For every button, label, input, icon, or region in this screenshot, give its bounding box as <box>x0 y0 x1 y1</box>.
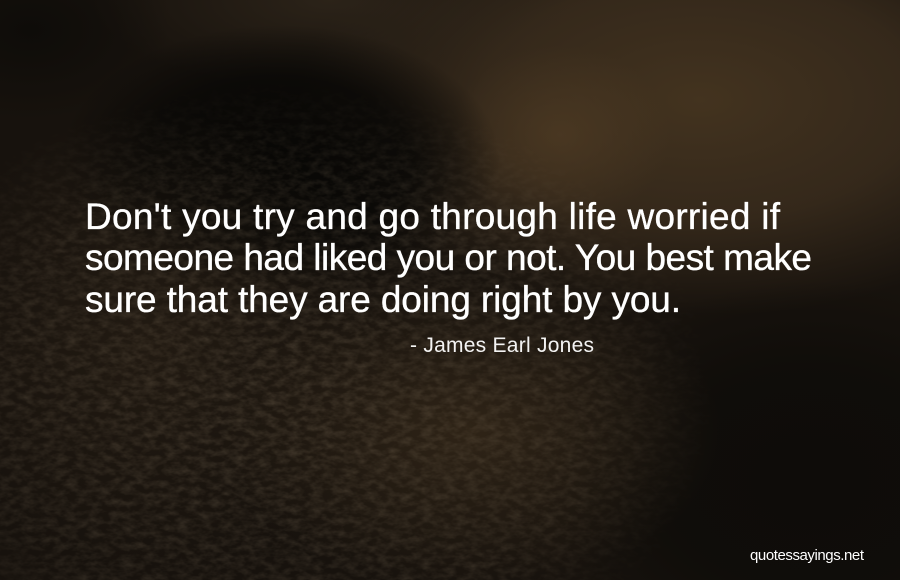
quote text: Don't you try and go through life worried if <box>85 196 781 237</box>
quote text <box>85 196 812 320</box>
author attribution: - James Earl Jones <box>410 334 594 357</box>
quote text: someone had liked you or not. You best make <box>85 237 812 278</box>
quote text: sure that they are doing right by you. <box>85 279 681 320</box>
watermark: quotessayings.net <box>750 547 865 564</box>
